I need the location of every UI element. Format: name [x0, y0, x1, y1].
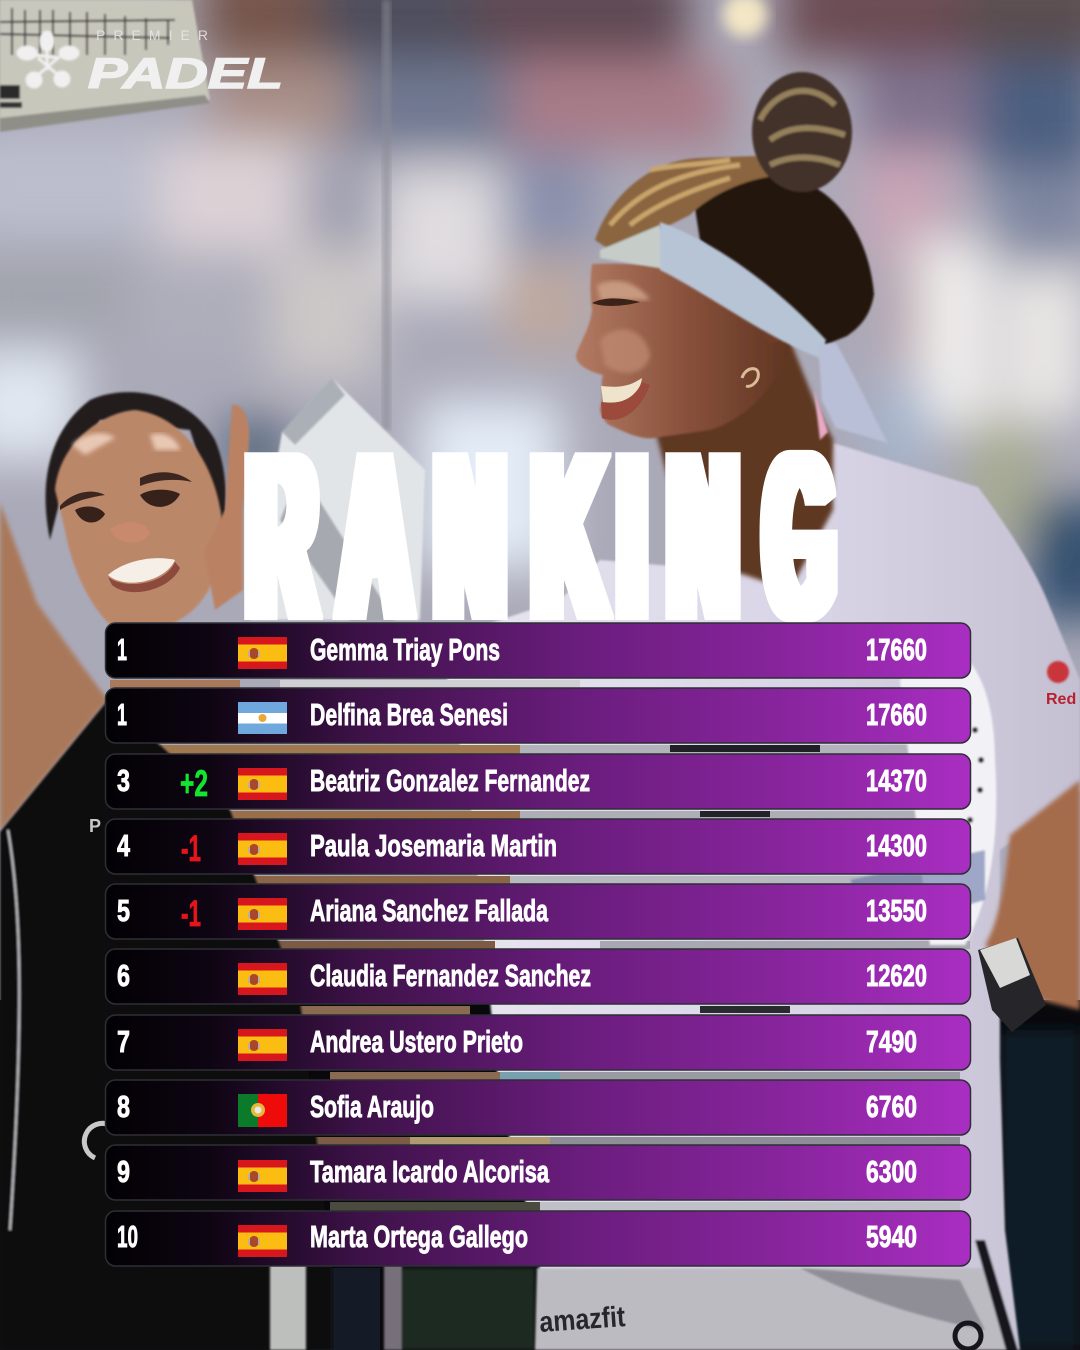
icon: padel star [17, 31, 79, 88]
row 5: Ariana Sanchez Fallada [310, 893, 549, 928]
player right: shirt [440, 443, 1080, 1350]
padel racket [850, 640, 996, 945]
title: R [248, 404, 315, 669]
title: N [436, 404, 504, 669]
title: N [669, 404, 737, 669]
strips of photo seen between rows [110, 680, 970, 1211]
headband [660, 222, 888, 443]
row 3: 14370 [866, 763, 927, 798]
row 8: 8 [117, 1089, 130, 1124]
row 10 [106, 1211, 970, 1266]
row 2: 1 [117, 697, 127, 732]
player left: arm [0, 503, 108, 832]
row 7: Andrea Ustero Prieto [310, 1024, 523, 1059]
title: K [533, 404, 605, 669]
row 4: 4 [117, 828, 131, 863]
row 4: Paula Josemaria Martin [310, 828, 557, 863]
row 8: 6760 [866, 1089, 917, 1124]
row 9: 9 [117, 1154, 130, 1189]
wordmark small: PREMIER [96, 27, 208, 43]
row 3: 3 [117, 763, 130, 798]
row 4: 14300 [866, 828, 927, 863]
title [248, 404, 833, 669]
title: I [619, 404, 645, 669]
sponsor marks on shirts: P [89, 816, 101, 836]
text: G [766, 404, 833, 669]
racket handle [270, 1262, 306, 1350]
watch [978, 938, 1046, 1032]
row 4: -1 [181, 828, 201, 869]
trophy top-left with logo plate [0, 0, 210, 132]
row 6 [106, 949, 970, 1004]
lower dark backdrop [0, 1000, 1080, 1350]
row 5: 5 [117, 893, 130, 928]
row 6: Claudia Fernandez Sanchez [310, 958, 591, 993]
right arm [985, 780, 1080, 1010]
wordmark large: PADEL [88, 50, 283, 98]
row 8: Sofia Araujo [310, 1089, 434, 1124]
red bull sponsor patch: Red [1046, 691, 1076, 708]
row 4 [106, 819, 970, 874]
row 5: 13550 [866, 893, 927, 928]
row 2 [106, 688, 970, 743]
player right: hair and bun [595, 72, 874, 345]
trophy [250, 378, 425, 620]
row 9: 6300 [866, 1154, 917, 1189]
logo: Premier Padel [17, 27, 283, 98]
row 3: Beatriz Gonzalez Fernandez [310, 763, 590, 798]
row 1: 17660 [866, 632, 927, 667]
row 7 [106, 1015, 970, 1070]
row 5 [106, 884, 970, 939]
ranking table [106, 623, 970, 1266]
red bull sponsor patch [1046, 661, 1076, 708]
title: A [340, 404, 410, 669]
sponsor marks on shirts [84, 816, 981, 1349]
row 8 [106, 1080, 970, 1135]
row 1 [106, 623, 970, 678]
player right: neck and face [576, 264, 833, 590]
row 10: Marta Ortega Gallego [310, 1219, 528, 1254]
row 7: 7490 [866, 1024, 917, 1059]
row 6: 12620 [866, 958, 927, 993]
row 5: -1 [181, 893, 201, 934]
row 2: 17660 [866, 697, 927, 732]
row 3 [106, 754, 970, 809]
row 9 [106, 1145, 970, 1200]
player left: hair [46, 392, 226, 540]
row 2: Delfina Brea Senesi [310, 697, 508, 732]
row 6: 6 [117, 958, 130, 993]
row 1: 1 [117, 632, 127, 667]
row 10: 5940 [866, 1219, 917, 1254]
row 3: +2 [180, 763, 208, 804]
row 9: Tamara Icardo Alcorisa [310, 1154, 550, 1189]
player left: face [55, 405, 249, 628]
row 7: 7 [117, 1024, 130, 1059]
player left: black top [0, 700, 332, 1350]
row 1: Gemma Triay Pons [310, 632, 500, 667]
row 10: 10 [117, 1219, 138, 1254]
sponsor marks on shirts: amazfit [538, 1301, 627, 1339]
